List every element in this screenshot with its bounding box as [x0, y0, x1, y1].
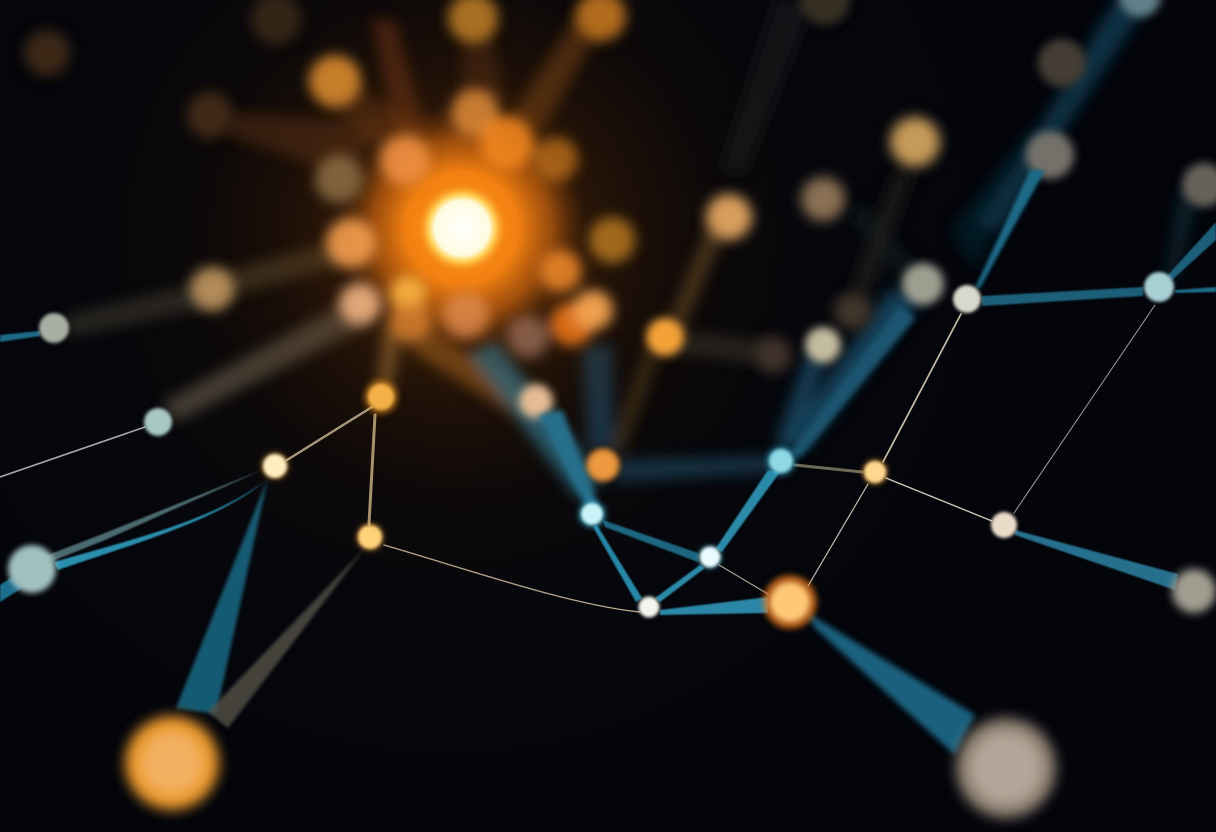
large foreground bokeh nodes [8, 545, 1216, 818]
far blurred beams [65, 0, 1200, 500]
blurred cool nodes [519, 0, 1216, 418]
teal tapered edges [0, 170, 1216, 755]
sharp network nodes [39, 272, 1174, 629]
central orange glow [337, 103, 587, 353]
thin link lines [0, 305, 1155, 612]
node halos [261, 380, 888, 629]
blurred nodes [24, 0, 940, 373]
hot core [418, 184, 506, 272]
wide orange haze [192, 0, 732, 510]
